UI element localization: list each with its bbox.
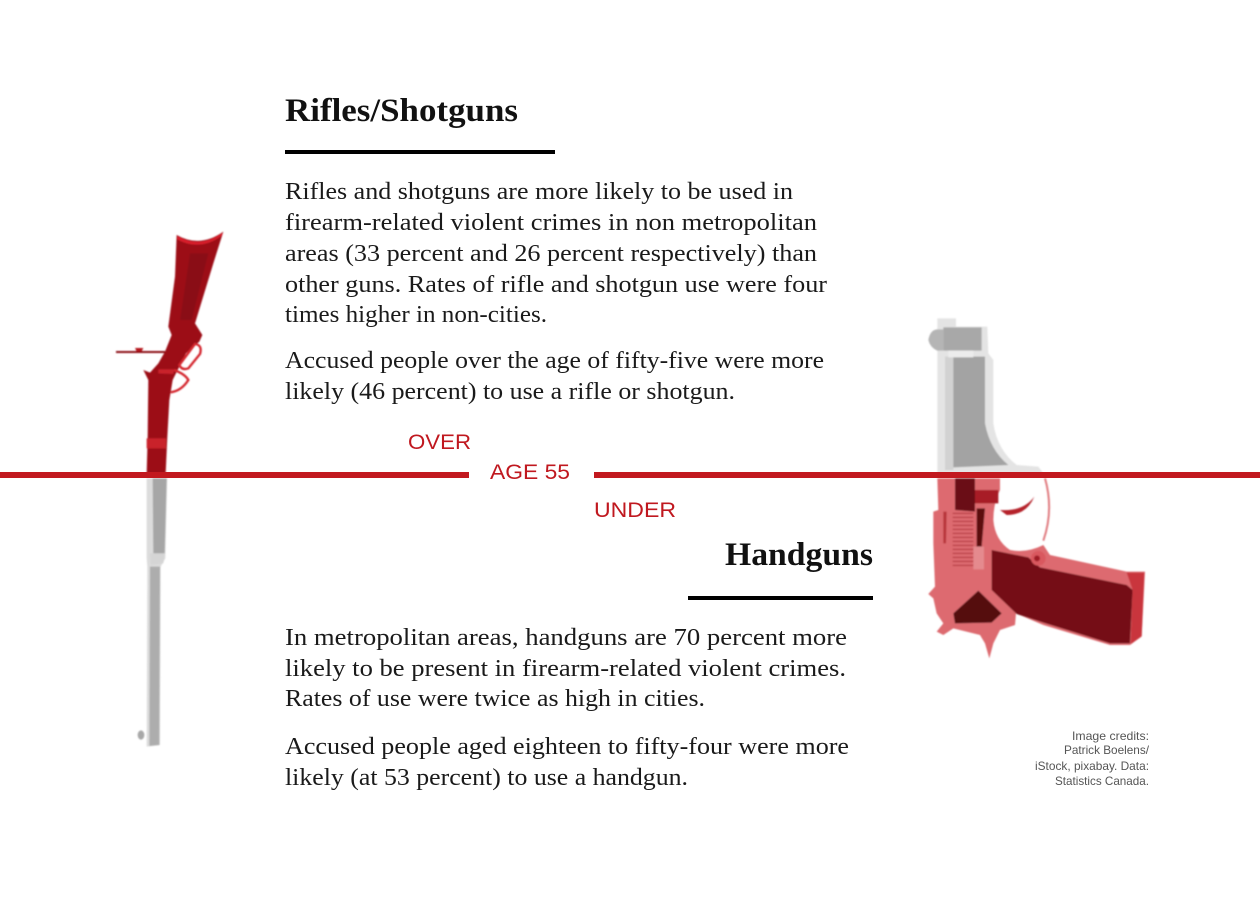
label: age 55: AGE 55: [490, 461, 570, 484]
text block: rifles paragraph 1: Rifles and shotguns are more likely to be used in: [285, 179, 793, 205]
text block: rifles paragraph 1: other guns. Rates of rifle and shotgun use were four: [285, 272, 827, 298]
text block: rifles paragraph 2: [285, 348, 824, 405]
text block: rifles paragraph 2: likely (46 percent) to use a rifle or shotgun.: [285, 379, 735, 405]
text block: handguns paragraph 1: Rates of use were twice as high in cities.: [285, 686, 705, 712]
image credits: Image credits:: [1072, 729, 1149, 743]
image credits: Statistics Canada.: [1055, 774, 1149, 788]
icon: handgun: [928, 318, 1145, 658]
text block: rifles paragraph 2: Accused people over the age of fifty-five were more: [285, 348, 824, 374]
label: over: OVER: [408, 431, 471, 454]
rifle upper red stock and receiver: [116, 232, 223, 473]
text block: handguns paragraph 2: [285, 734, 849, 791]
icon: rifle: [116, 232, 223, 747]
text block: handguns paragraph 2: likely (at 53 percent) to use a handgun.: [285, 765, 688, 791]
handgun upper gray slide: [928, 318, 1043, 473]
text block: rifles paragraph 1: times higher in non-cities.: [285, 302, 547, 328]
heading: Rifles/Shotguns: Rifles/Shotguns: [285, 93, 518, 129]
image credits: [1035, 729, 1150, 788]
text block: rifles paragraph 1: [285, 179, 827, 328]
heading rule: handguns: [688, 596, 873, 600]
image credits: iStock, pixabay. Data:: [1035, 759, 1149, 773]
image credits: Patrick Boelens/: [1064, 743, 1150, 757]
handgun lower red grip and frame: [928, 478, 1145, 658]
red divider line: [0, 472, 1260, 478]
text block: handguns paragraph 1: [285, 625, 847, 712]
text block: handguns paragraph 1: likely to be present in firearm-related violent crimes.: [285, 656, 846, 682]
text block: handguns paragraph 1: In metropolitan areas, handguns are 70 percent more: [285, 625, 847, 651]
heading: Handguns: Handguns: [725, 537, 873, 573]
heading rule: rifles: [285, 150, 555, 154]
text block: rifles paragraph 1: firearm-related violent crimes in non metropolitan: [285, 210, 817, 236]
text block: rifles paragraph 1: areas (33 percent and 26 percent respectively) than: [285, 241, 817, 267]
text block: handguns paragraph 2: Accused people aged eighteen to fifty-four were more: [285, 734, 849, 760]
label: under: UNDER: [594, 499, 676, 522]
rifle lower gray barrel: [138, 478, 167, 747]
